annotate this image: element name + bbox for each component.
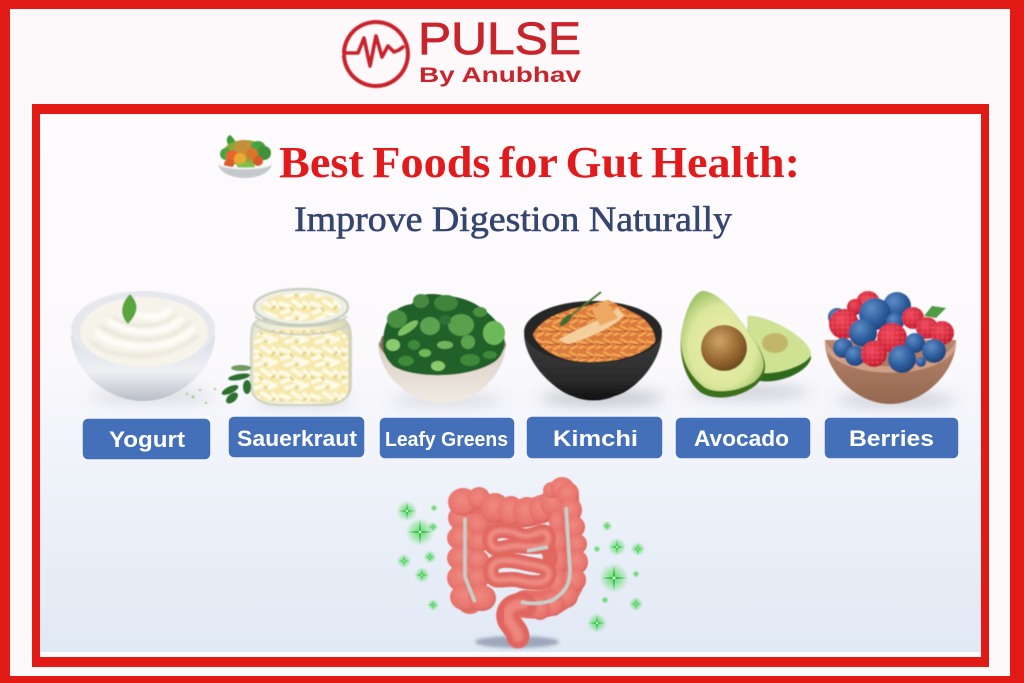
label: berries — [824, 417, 959, 459]
label: yogurt — [82, 418, 211, 460]
label: yogurt: Yogurt — [109, 427, 186, 452]
front half — [681, 291, 765, 398]
rectum — [508, 604, 524, 637]
icon: pulse circle — [344, 22, 408, 86]
back half — [747, 316, 811, 381]
content panel with red border — [32, 104, 989, 667]
label: avocado — [675, 417, 811, 459]
subtitle: Improve Digestion Naturally — [294, 199, 732, 239]
green sparkles around intestine — [397, 501, 645, 633]
icon: salad bowl emoji — [218, 135, 272, 178]
food: kimchi bowl — [524, 292, 664, 405]
pale tract lines — [465, 507, 570, 603]
label: kimchi — [526, 416, 663, 459]
colon — [447, 477, 588, 620]
food: berries — [825, 291, 956, 407]
label: leafy greens — [379, 417, 515, 459]
colon base tube — [465, 497, 569, 605]
label: leafy greens: Leafy Greens — [385, 429, 508, 451]
food: yogurt — [71, 291, 216, 404]
logo: Pulse by Anubhav — [344, 13, 581, 87]
label: avocado: Avocado — [694, 426, 789, 451]
food: avocado — [681, 291, 811, 399]
ground shadow — [475, 636, 559, 648]
illustration: intestine — [447, 477, 588, 648]
label: sauerkraut — [228, 416, 365, 458]
food: leafy greens — [378, 294, 506, 407]
logo tagline: By Anubhav — [419, 64, 581, 87]
title: Best Foods for Gut Health: — [279, 138, 800, 187]
labels: food names — [82, 416, 959, 460]
herb sprig — [220, 365, 251, 406]
small intestine — [490, 531, 550, 583]
label: berries: Berries — [849, 426, 934, 451]
label: kimchi: Kimchi — [553, 426, 638, 451]
logo wordmark: PULSE — [418, 13, 581, 64]
food: sauerkraut jar — [220, 289, 354, 408]
label: sauerkraut: Sauerkraut — [237, 426, 358, 451]
